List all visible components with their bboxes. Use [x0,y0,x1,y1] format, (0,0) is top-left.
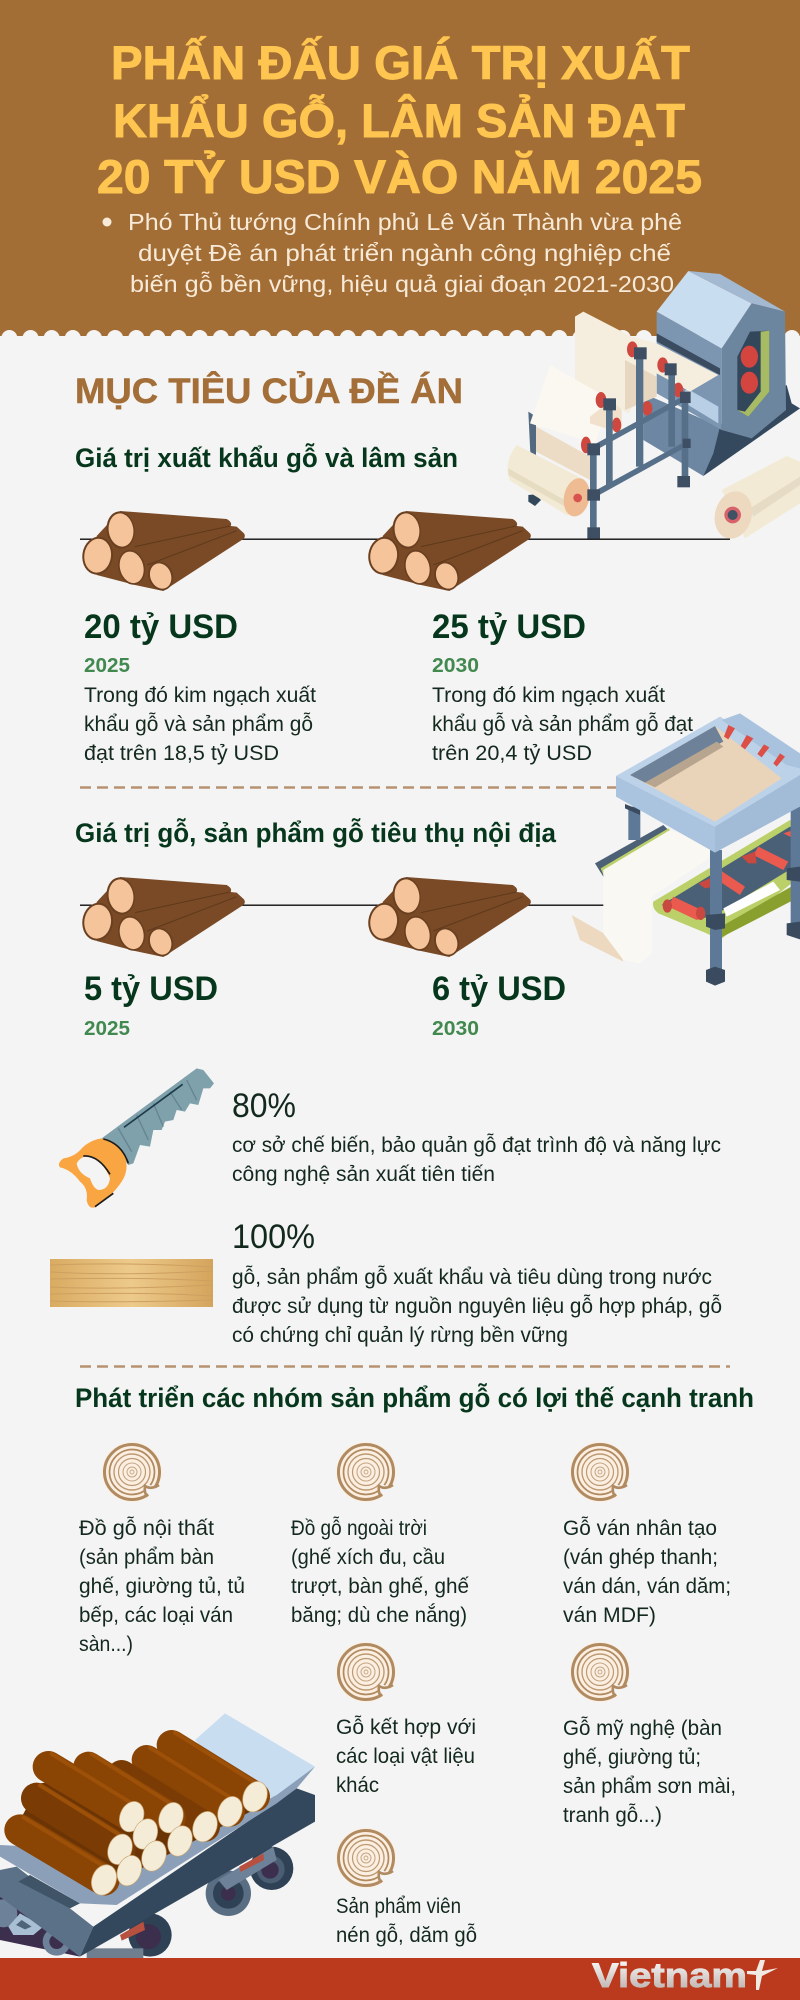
icon: tree ring 4 [336,1642,396,1704]
product: pellets [336,1894,477,1947]
product: engineered wood: Gỗ ván nhân tạo [563,1515,717,1540]
icon: log pile 2030 [366,510,531,594]
intro bullet text: duyệt Đề án phát triển ngành công nghiệp chế [138,240,671,266]
stat: 80 percent: công nghệ sản xuất tiên tiến [232,1162,495,1186]
subheading: export value: Giá trị xuất khẩu gỗ và lâm sản [75,442,458,473]
stat: domestic 2030: 6 tỷ USD [432,970,566,1008]
product: pellets: nén gỗ, dăm gỗ [336,1922,477,1947]
subheading: domestic value: Giá trị gỗ, sản phẩm gỗ tiêu thụ nội địa [75,817,557,848]
product: engineered wood: ván MDF) [563,1603,656,1627]
product: engineered wood [563,1515,731,1627]
stat: 2025 export: đạt trên 18,5 tỷ USD [84,741,279,765]
icon: log pile 2025 [80,510,245,594]
icon: log pile 2025 domestic [80,876,245,960]
intro bullet text: biến gỗ bền vững, hiệu quả giai đoạn 2021-2030. [130,271,681,297]
stat: 2025 export: khẩu gỗ và sản phẩm gỗ [84,711,313,736]
product: outdoor furniture: (ghế xích đu, cầu [291,1545,445,1569]
product: fine art wood: tranh gỗ...) [563,1802,662,1827]
stat: domestic 2025 [84,970,218,1040]
illustration: log wagon [0,1713,315,1960]
product: mixed materials [336,1714,476,1797]
header band [0,0,800,336]
product: outdoor furniture: băng; dù che nắng) [291,1602,467,1627]
stat: 100 percent: có chứng chỉ quản lý rừng bền vững [232,1323,568,1347]
footer band [0,1958,800,2000]
stat: 2030 export [432,608,693,765]
product: fine art wood: ghế, giường tủ; [563,1745,701,1769]
stat: domestic 2025: 5 tỷ USD [84,970,218,1008]
stat: 2030 export: 2030 [432,655,479,677]
logo: Vietnam+: Vietnam [592,1957,747,1995]
product: indoor furniture: bếp, các loại ván [79,1603,233,1627]
stat: 2025 export: 20 tỷ USD [84,608,238,646]
intro bullet text [102,209,682,297]
scalloped edge [0,326,800,340]
product: indoor furniture: Đồ gỗ nội thất [79,1515,214,1540]
product: pellets: Sản phẩm viên [336,1894,461,1918]
stat: 2030 export: Trong đó kim ngạch xuất [432,683,665,707]
stat: 80 percent: cơ sở chế biến, bảo quản gỗ đạt trình độ và năng lực [232,1132,721,1157]
product: indoor furniture [79,1515,245,1656]
icon: saw [59,1068,214,1208]
section heading: MỤC TIÊU CỦA ĐỀ ÁN [75,371,463,411]
stat: 100 percent [232,1218,722,1347]
product: mixed materials: khác [336,1773,379,1797]
product: fine art wood: sản phẩm sơn mài, [563,1774,736,1798]
stat: 2030 export: trên 20,4 tỷ USD [432,741,592,765]
icon: tree ring 1 [102,1442,162,1504]
illustration: conveyor table machine [572,713,800,986]
product: outdoor furniture: Đồ gỗ ngoài trời [291,1515,427,1540]
timeline line 1 [80,538,730,540]
stat: 2030 export: khẩu gỗ và sản phẩm gỗ đạt [432,711,693,736]
stat: domestic 2025: 2025 [84,1018,130,1040]
product: indoor furniture: ghế, giường tủ, tủ [79,1574,245,1598]
timeline line 2 [80,904,605,906]
stat: 100 percent: được sử dụng từ nguồn nguyên liệu gỗ hợp pháp, gỗ [232,1293,722,1318]
icon: tree ring 2 [336,1442,396,1504]
intro bullet text: Phó Thủ tướng Chính phủ Lê Văn Thành vừa phê [128,209,682,235]
product: outdoor furniture [291,1515,469,1627]
stat: domestic 2030: 2030 [432,1018,479,1040]
stat: 100 percent: 100% [232,1218,315,1256]
illustration: paper machine [507,271,800,543]
stat: 80 percent [232,1087,721,1186]
icon: tree ring 5 [570,1642,630,1704]
subheading: product groups: Phát triển các nhóm sản phẩm gỗ có lợi thế cạnh tranh [75,1382,754,1413]
title [97,36,702,203]
product: fine art wood: Gỗ mỹ nghệ (bàn [563,1715,722,1740]
icon: tree ring 6 [336,1828,396,1890]
product: outdoor furniture: trượt, bàn ghế, ghế [291,1574,469,1598]
product: indoor furniture: (sản phẩm bàn [79,1545,214,1569]
product: engineered wood: (ván ghép thanh; [563,1545,718,1569]
product: mixed materials: các loại vật liệu [336,1744,475,1768]
product: fine art wood [563,1715,736,1827]
stat: 2025 export: 2025 [84,655,130,677]
stat: 100 percent: gỗ, sản phẩm gỗ xuất khẩu và tiêu dùng trong nước [232,1264,712,1289]
stat: 80 percent: 80% [232,1087,296,1125]
title: PHẤN ĐẤU GIÁ TRỊ XUẤT [111,36,690,89]
stat: 2025 export: Trong đó kim ngạch xuất [84,683,316,707]
stat: 2025 export [84,608,316,765]
title: KHẨU GỖ, LÂM SẢN ĐẠT [113,94,685,147]
product: engineered wood: ván dán, ván dăm; [563,1574,731,1598]
product: indoor furniture: sàn...) [79,1632,133,1656]
title: 20 TỶ USD VÀO NĂM 2025 [97,150,702,203]
icon: tree ring 3 [570,1442,630,1504]
stat: 2030 export: 25 tỷ USD [432,608,586,646]
product: mixed materials: Gỗ kết hợp với [336,1714,476,1739]
icon: log pile 2030 domestic [366,876,531,960]
icon: wood plank [50,1259,213,1307]
stat: domestic 2030 [432,970,566,1040]
